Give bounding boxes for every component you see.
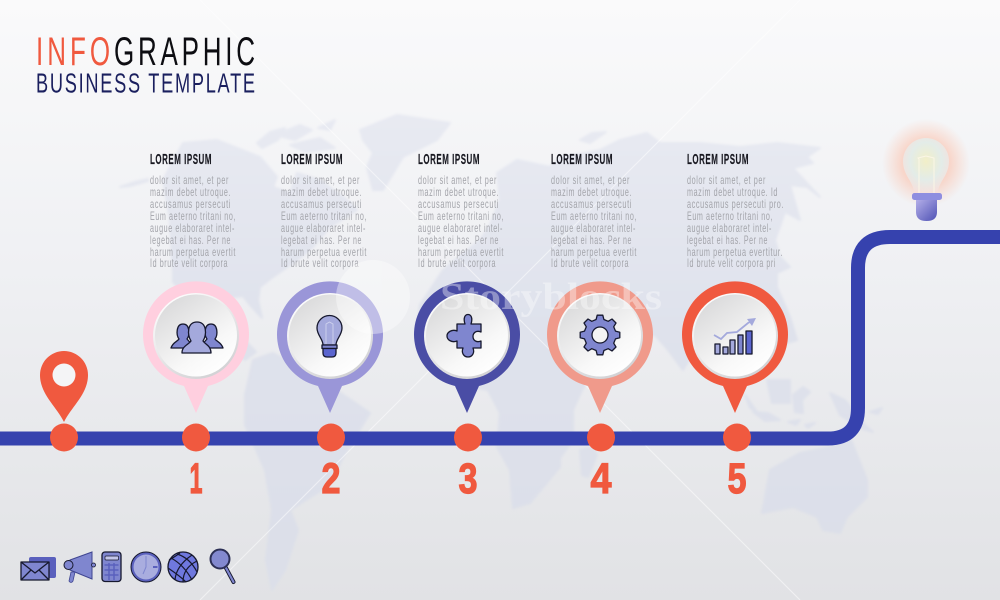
icon: globe	[168, 552, 198, 582]
text block 4: accusamus persecuti	[551, 197, 632, 211]
text block 5: augue elaboraret intel-	[687, 221, 772, 235]
text block 3: augue elaboraret intel-	[418, 221, 503, 235]
text block 3: accusamus persecuti	[418, 197, 499, 211]
text block 5: legebat ei has. Per ne	[687, 233, 768, 247]
icon: mail	[21, 557, 56, 580]
text block 4: Eum aeterno tritani no,	[551, 209, 637, 223]
text block 1: LOREM IPSUM	[150, 151, 212, 168]
icon: magnifier	[210, 550, 234, 582]
world map	[120, 115, 882, 590]
text block 1: Eum aeterno tritani no,	[150, 209, 236, 223]
number 4: 4	[590, 455, 612, 503]
title: BUSINESS TEMPLATE	[36, 69, 255, 100]
text block 3: legebat ei has. Per ne	[418, 233, 499, 247]
marker 5	[723, 424, 751, 452]
text block 5: mazim debet utroque. Id	[687, 185, 778, 199]
text block 5: dolor sit amet, et per	[687, 173, 766, 187]
watermark	[336, 260, 662, 334]
number 2: 2	[322, 455, 340, 503]
text block 1: legebat ei has. Per ne	[150, 233, 231, 247]
text block 1: Id brute velit corpora	[150, 256, 228, 270]
text block 4: mazim debet utroque.	[551, 185, 632, 199]
text block 3: mazim debet utroque.	[418, 185, 499, 199]
marker 2	[317, 424, 345, 452]
text block 1: harum perpetua evertit	[150, 245, 236, 259]
road timeline	[0, 237, 1000, 438]
number 1: 1	[190, 455, 202, 503]
title	[36, 29, 255, 100]
text block 3: harum perpetua evertit	[418, 245, 504, 259]
text block 4: harum perpetua evertit	[551, 245, 637, 259]
title: INFO	[36, 29, 110, 74]
pin 5	[682, 281, 788, 413]
marker 1	[182, 424, 210, 452]
text block 4: dolor sit amet, et per	[551, 173, 630, 187]
text block 3	[418, 151, 504, 270]
icon: light bulb	[317, 316, 342, 357]
icon: people	[171, 322, 223, 353]
text block 4: augue elaboraret intel-	[551, 221, 636, 235]
text block 2: mazim debet utroque.	[281, 185, 362, 199]
text block 3: LOREM IPSUM	[418, 151, 480, 168]
text block 2: LOREM IPSUM	[281, 151, 343, 168]
text block 2: dolor sit amet, et per	[281, 173, 360, 187]
icon: puzzle piece	[447, 314, 481, 357]
text block 1: mazim debet utroque.	[150, 185, 231, 199]
text block 2: Id brute velit corpora	[281, 256, 359, 270]
text block 2: harum perpetua evertit	[281, 245, 367, 259]
icon: calculator	[102, 552, 121, 582]
number 3: 3	[458, 455, 478, 503]
icon: gear	[580, 315, 620, 355]
text block 2: augue elaboraret intel-	[281, 221, 366, 235]
icon row	[21, 550, 234, 582]
text block 4: LOREM IPSUM	[551, 151, 613, 168]
text block 5: Eum aeterno tritani no,	[687, 209, 773, 223]
text block 2: accusamus persecuti	[281, 197, 362, 211]
text block 5	[687, 151, 784, 270]
number 5: 5	[728, 455, 746, 503]
text block 2: Eum aeterno tritani no,	[281, 209, 367, 223]
icon: growth chart	[714, 318, 756, 354]
glowing light bulb	[882, 119, 970, 221]
text block 1: augue elaboraret intel-	[150, 221, 235, 235]
pin 3	[414, 281, 520, 413]
start location pin	[40, 351, 88, 422]
text block 1: accusamus persecuti	[150, 197, 231, 211]
text block 5: Id brute velit corpora pri	[687, 256, 776, 270]
title: GRAPHIC	[114, 29, 255, 74]
pin 1	[143, 281, 249, 413]
text block 3: Eum aeterno tritani no,	[418, 209, 504, 223]
pin 4	[547, 281, 653, 413]
text block 4: legebat ei has. Per ne	[551, 233, 632, 247]
icon: clock	[131, 552, 161, 582]
text block 5: LOREM IPSUM	[687, 151, 749, 168]
watermark: Storyblocks	[440, 276, 662, 318]
text block 4: Id brute velit corpora	[551, 256, 629, 270]
text block 3: dolor sit amet, et per	[418, 173, 497, 187]
text block 2: legebat ei has. Per ne	[281, 233, 362, 247]
text block 1: dolor sit amet, et per	[150, 173, 229, 187]
pin 2	[277, 281, 383, 413]
text block 5: harum perpetua evertitur.	[687, 245, 783, 259]
text block 1	[150, 151, 236, 270]
start dot	[50, 424, 78, 452]
text block 5: accusamus persecuti pro.	[687, 197, 784, 211]
text block 2	[281, 151, 367, 270]
marker 3	[454, 424, 482, 452]
marker 4	[587, 424, 615, 452]
diagonal light rays	[200, 0, 800, 600]
text block 4	[551, 151, 637, 270]
icon: megaphone	[64, 552, 96, 582]
text block 3: Id brute velit corpora	[418, 256, 496, 270]
